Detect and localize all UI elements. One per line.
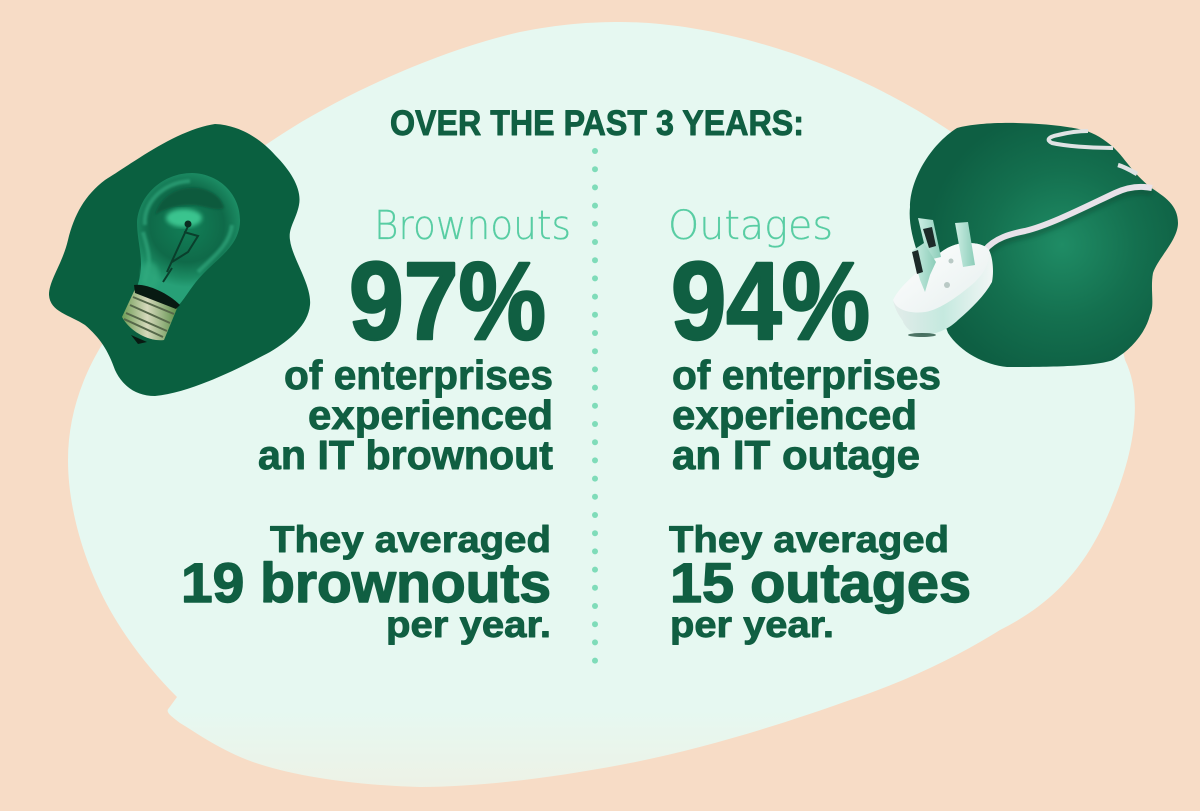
middle cable — [1118, 165, 1137, 174]
description: outage share: of enterprises — [672, 352, 941, 398]
bulb glass — [137, 173, 240, 306]
panel: outages — [668, 203, 971, 645]
stat: 15 outages per year: They averaged — [669, 519, 949, 560]
description: outage share: experienced — [672, 392, 917, 438]
stat: 97%: 97% — [349, 240, 546, 363]
icon: plug on green blob — [893, 123, 1178, 367]
description: brownout share: experienced — [308, 392, 553, 438]
description: brownout share: an IT brownout — [258, 432, 553, 478]
label: outages: Outages — [668, 203, 833, 249]
stat: 15 outages per year: 15 outages — [670, 551, 971, 614]
stat: 94%: 94% — [671, 240, 870, 363]
stat: 19 brownouts per year: They averaged — [270, 519, 551, 560]
bulb screw base — [122, 285, 180, 344]
plug pins — [912, 218, 975, 292]
icon: light bulb on green blob — [49, 124, 310, 396]
stat: 19 brownouts per year — [181, 519, 551, 645]
upper cable loop — [1049, 131, 1113, 148]
stat: 15 outages per year — [669, 519, 971, 645]
stat: 19 brownouts per year: 19 brownouts — [181, 551, 551, 614]
stat: 15 outages per year: per year. — [670, 604, 834, 645]
description: outage share: an IT outage — [672, 432, 920, 478]
description: brownout share — [258, 352, 553, 478]
stat: 19 brownouts per year: per year. — [386, 604, 551, 645]
label: brownouts: Brownouts — [374, 203, 571, 249]
main cable — [985, 192, 1152, 255]
heading: OVER THE PAST 3 YEARS: — [390, 104, 804, 143]
plug body — [893, 243, 993, 337]
panel: brownouts — [181, 203, 571, 645]
description: outage share — [672, 352, 941, 478]
description: brownout share: of enterprises — [284, 352, 553, 398]
dotted divider — [592, 148, 598, 664]
